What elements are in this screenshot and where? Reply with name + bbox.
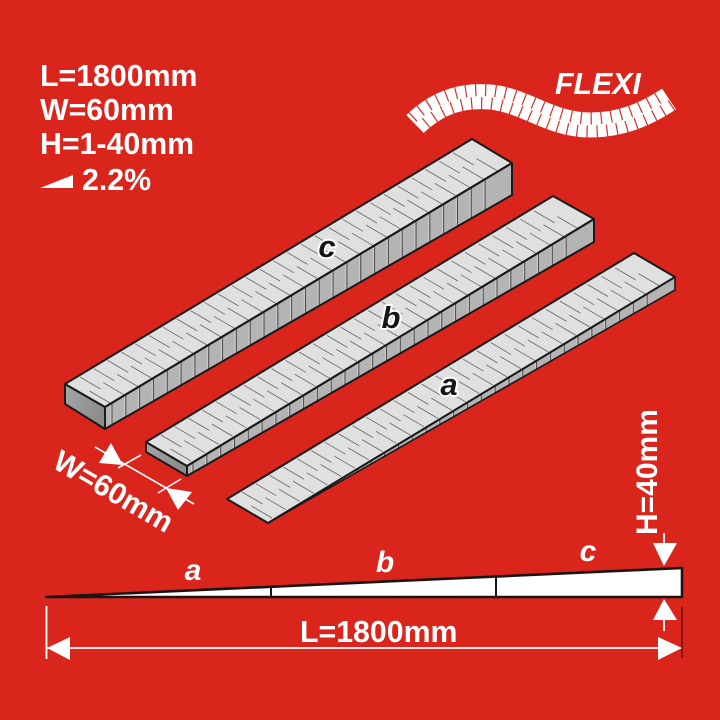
wedge section labels: a (185, 554, 201, 587)
wedge section labels: c (580, 535, 597, 568)
specifications text block: L=1800mm (40, 60, 197, 93)
specifications text block: W=60mm (40, 94, 174, 127)
strip c (tallest) (65, 139, 512, 445)
height dimension H=40mm (631, 409, 677, 631)
label b: b (382, 300, 401, 335)
length dimension L=1800mm (46, 606, 682, 660)
side profile wedge (46, 568, 682, 597)
wedge section labels (185, 535, 597, 587)
specifications text block: 2.2% (82, 164, 151, 197)
strip b (medium) (146, 196, 594, 503)
height dimension H=40mm: H=40mm (631, 409, 664, 535)
length dimension L=1800mm: L=1800mm (300, 616, 457, 649)
icon: flexible wavy strip (410, 90, 673, 132)
strip a (thinnest) (226, 252, 676, 524)
wedge section labels: b (376, 546, 394, 579)
FLEXI heading: FLEXI (555, 68, 641, 101)
label c: c (318, 229, 336, 264)
width dimension W=60mm: W=60mm (48, 444, 179, 539)
label a: a (440, 367, 458, 402)
specifications text block: H=1-40mm (40, 128, 194, 161)
specifications text block (40, 60, 197, 197)
